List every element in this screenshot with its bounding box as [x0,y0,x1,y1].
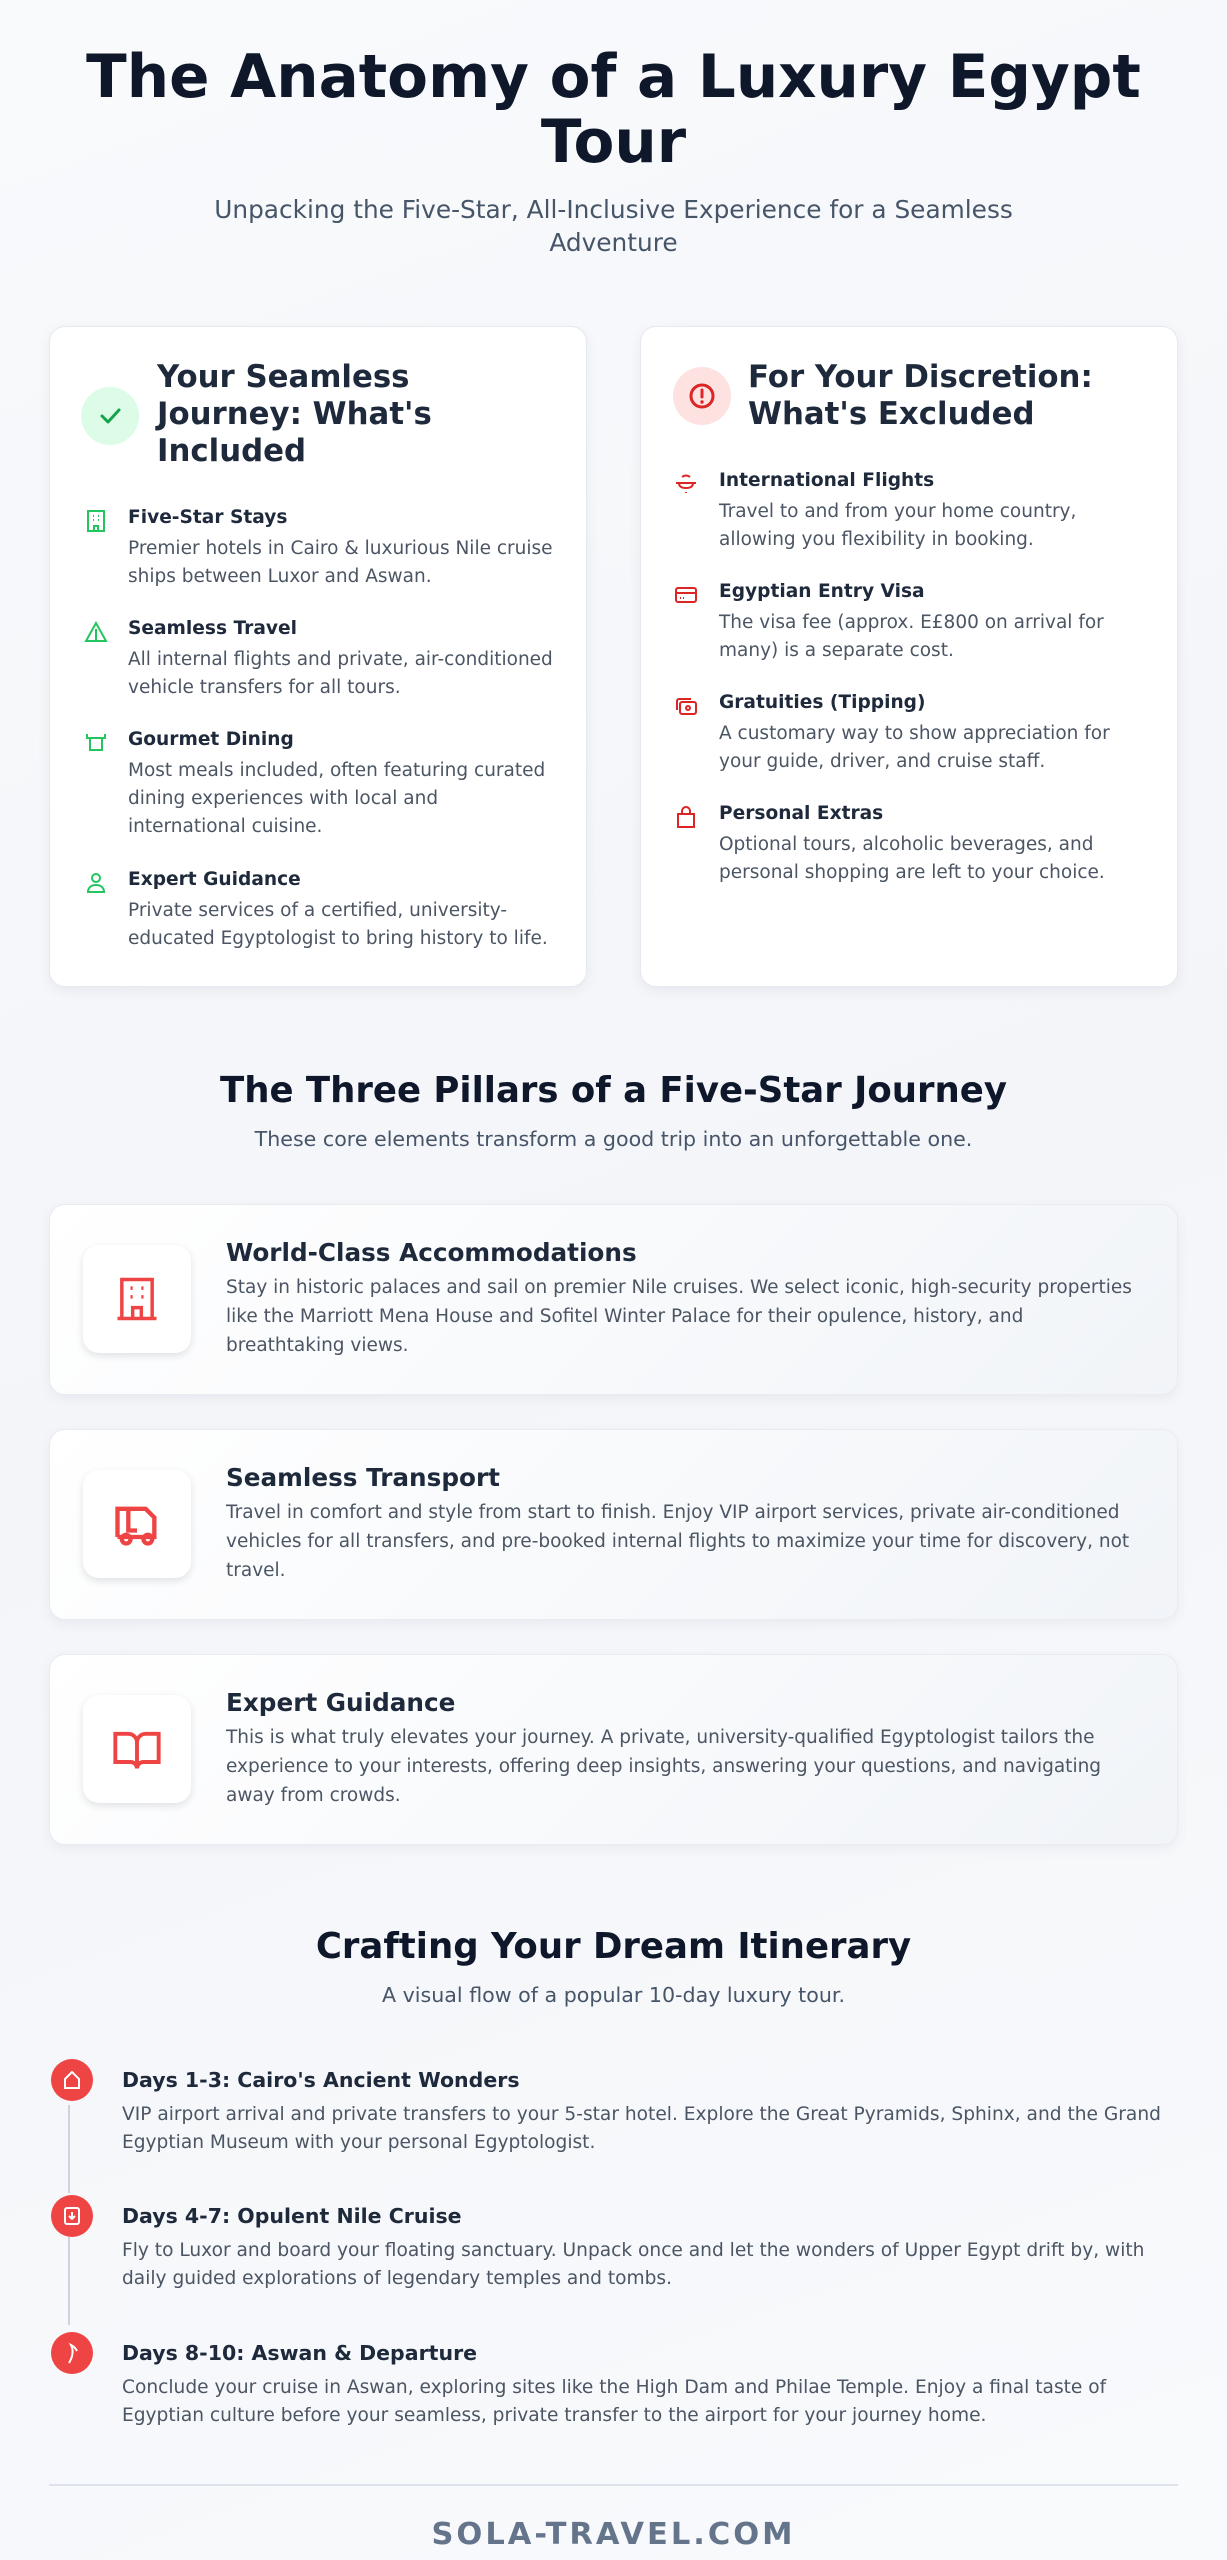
icon: home [51,2059,93,2101]
heading: itinerary: Crafting Your Dream Itinerary [316,1926,911,1967]
item: gourmet dining: Gourmet Dining [128,729,294,750]
pillar text: vehicles for all transfers, and pre-booked internal flights to maximize your time for discovery, not [226,1531,1129,1552]
panel: guidance [49,1654,1178,1845]
item: seamless travel [128,618,553,698]
pillar title: World-Class Accommodations [226,1238,637,1267]
timeline step 3: Conclude your cruise in Aswan, exploring sites like the High Dam and Philae Temple. Enjoy a final taste of [122,2377,1106,2398]
heading: Journey: What's [157,396,432,432]
pillar text: This is what truly elevates your journey. A private, university-qualified Egyptologist tailors the [226,1727,1094,1748]
item: personal extras: Personal Extras [719,803,883,824]
timeline step 2: Fly to Luxor and board your floating sanctuary. Unpack once and let the wonders of Upper Egypt drift by, with [122,2240,1144,2261]
pillar text [226,1502,1129,1581]
icon: card [675,587,697,603]
item: gourmet dining: Most meals included, often featuring curated [128,760,545,781]
title [86,43,1141,177]
pillar text: Travel in comfort and style from start to finish. Enjoy VIP airport services, private air-conditioned [226,1502,1120,1523]
heading: For Your Discretion: [748,359,1093,395]
item: seamless travel: Seamless Travel [128,618,297,639]
subheading: pillars: These core elements transform a good trip into an unforgettable one. [255,1127,972,1151]
item: international flights [718,470,1076,550]
item: five-star stays [128,507,553,587]
pillar title: Seamless Transport [226,1463,500,1492]
panel: excluded [640,326,1178,987]
panel: included [49,326,587,987]
icon: cruise [51,2195,93,2237]
timeline step 1: Egyptian Museum with your personal Egyptologist. [122,2132,595,2153]
icon: money [676,698,697,715]
pillar title: Expert Guidance [226,1688,455,1717]
icon: check circle [81,387,139,445]
heading: Included [157,433,306,469]
subtitle: Unpacking the Five-Star, All-Inclusive Experience for a Seamless [214,195,1013,224]
pillar text: breathtaking views. [226,1335,409,1356]
title: Tour [541,108,686,177]
pillar text: experience to your interests, offering deep insights, answering your questions, and navigating [226,1756,1101,1777]
timeline step 1: Days 1-3: Cairo's Ancient Wonders [122,2068,520,2092]
pillar text: like the Marriott Mena House and Sofitel Winter Palace for their opulence, history, and [226,1306,1023,1327]
item: gourmet dining: international cuisine. [128,816,322,837]
item: expert guidance: educated Egyptologist to bring history to life. [128,928,548,949]
item: personal extras [719,803,1105,883]
pillar text: Stay in historic palaces and sail on premier Nile cruises. We select iconic, high-security properties [226,1277,1132,1298]
item: gratuities: your guide, driver, and cruise staff. [719,751,1045,772]
item: international flights: International Flights [719,470,934,491]
item: gratuities: A customary way to show appreciation for [719,723,1110,744]
item: expert guidance: Private services of a certified, university- [128,900,507,921]
panel: transport [49,1429,1178,1620]
item: five-star stays: Five-Star Stays [128,507,287,528]
item: personal extras: personal shopping are left to your choice. [719,862,1105,883]
item: five-star stays: Premier hotels in Cairo & luxurious Nile cruise [128,538,553,559]
item: gratuities [719,692,1110,772]
timeline step 3: Days 8-10: Aswan & Departure [122,2341,477,2365]
item: expert guidance: Expert Guidance [128,869,301,890]
icon: building [87,510,105,532]
item: personal extras: Optional tours, alcoholic beverages, and [719,834,1093,855]
timeline step 2 [51,2195,1144,2289]
heading: What's Excluded [748,396,1034,432]
heading: three pillars: The Three Pillars of a Five-Star Journey [220,1070,1007,1111]
icon: vehicle [83,1470,191,1578]
subtitle [214,195,1013,257]
icon: departure [51,2332,93,2374]
title: The Anatomy of a Luxury Egypt [86,43,1141,112]
heading [748,359,1093,432]
icon: person [87,873,105,893]
pillar text [226,1727,1101,1806]
item: international flights: allowing you flexibility in booking. [719,529,1034,550]
item: expert guidance [128,869,548,949]
timeline step 3: Egyptian culture before your seamless, private transfer to the airport for your journey home. [122,2405,986,2426]
item: visa: Egyptian Entry Visa [719,581,925,602]
icon: triangle [84,621,108,642]
item: gourmet dining: dining experiences with local and [128,788,438,809]
icon: plane [676,474,696,493]
item: gourmet dining [128,729,545,837]
subheading: itinerary: A visual flow of a popular 10-day luxury tour. [382,1983,845,2007]
item: visa: The visa fee (approx. E£800 on arrival for [719,612,1104,633]
icon: cup [86,734,106,751]
item: seamless travel: vehicle transfers for all tours. [128,677,401,698]
timeline step 3 [51,2332,1107,2426]
item: international flights: Travel to and from your home country, [719,501,1076,522]
timeline step 1: VIP airport arrival and private transfers to your 5-star hotel. Explore the Great Pyramids, Sphinx, and the Grand [122,2104,1161,2125]
pillar text [226,1277,1132,1356]
timeline connectors [68,2105,70,2325]
subtitle: Adventure [549,228,678,257]
item: seamless travel: All internal flights and private, air-conditioned [128,649,553,670]
heading [155,359,432,469]
pillar text: away from crowds. [226,1785,401,1806]
panel: accommodations [49,1204,1178,1395]
icon: bag [677,806,695,828]
item: visa [718,581,1104,661]
item: visa: many) is a separate cost. [719,640,954,661]
pillar text: travel. [226,1560,286,1581]
item: gratuities: Gratuities (Tipping) [719,692,925,713]
timeline step 1 [51,2059,1161,2153]
footer brand: SOLA-TRAVEL.COM [431,2517,796,2552]
item: five-star stays: ships between Luxor and Aswan. [128,566,432,587]
timeline step 2: daily guided explorations of legendary temples and tombs. [122,2268,672,2289]
icon: book [83,1695,191,1803]
timeline step 2: Days 4-7: Opulent Nile Cruise [122,2204,462,2228]
heading: Your Seamless [157,359,410,395]
icon: hotel [83,1245,191,1353]
icon: alert circle [673,367,731,425]
